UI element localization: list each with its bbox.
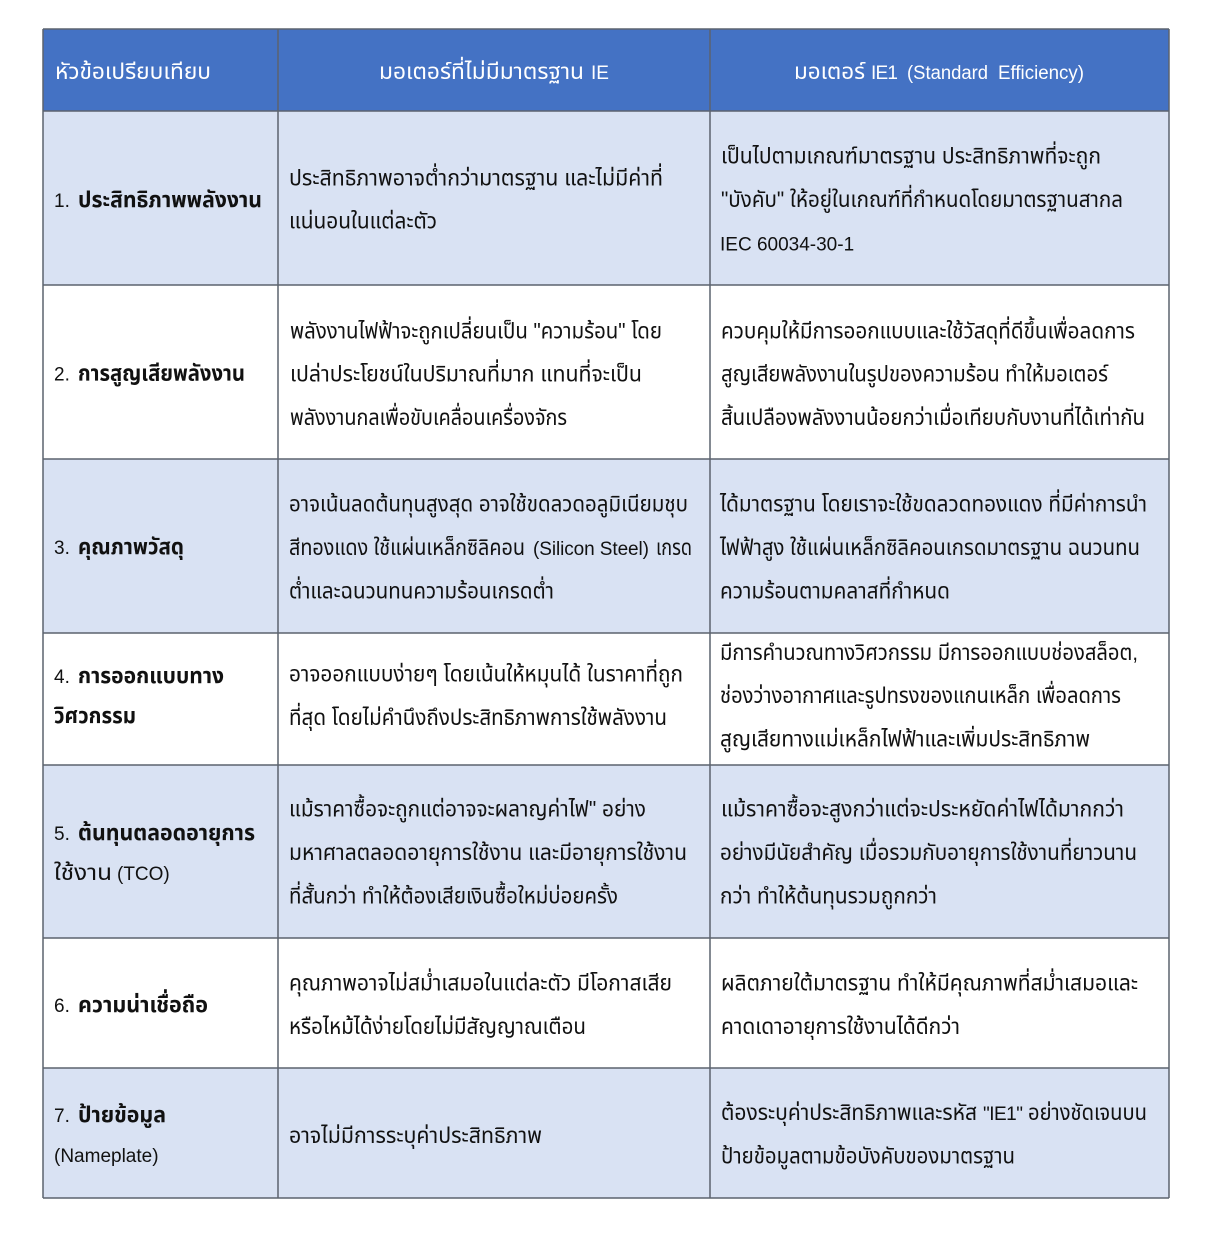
row 4 IE1 text: สูญเสียทางแม่เหล็กไฟฟ้าและเพิ่มประสิทธิภาพ	[720, 725, 1090, 752]
row 4 label: 4.	[54, 667, 70, 688]
row 5 label: (TCO)	[117, 864, 170, 885]
row 4 non-IE text: ที่สุด โดยไม่คำนึงถึงประสิทธิภาพการใช้พลังงาน	[289, 702, 667, 731]
header: IE1 motor column: มอเตอร์	[794, 59, 866, 84]
row 3 label: คุณภาพวัสดุ	[78, 534, 184, 560]
row 4 label: การออกแบบทาง	[78, 663, 224, 688]
row 7 label: ป้ายข้อมูล	[78, 1102, 166, 1128]
row 6 non-IE text: คุณภาพอาจไม่สม่ำเสมอในแต่ละตัว มีโอกาสเสีย	[289, 968, 672, 996]
row 7 IE1 text: อย่างชัดเจนบน	[1028, 1100, 1147, 1125]
row 6 non-IE text	[278, 938, 710, 1068]
row 3 IE1 text	[710, 459, 1169, 633]
row 5 non-IE text: ที่สั้นกว่า ทำให้ต้องเสียเงินซื้อใหม่บ่อยครั้ง	[289, 880, 618, 908]
row 1 label	[43, 111, 278, 285]
row 3 non-IE text	[278, 459, 710, 633]
header: non-IE motor column: IE	[591, 63, 609, 84]
row 2 non-IE text	[278, 285, 710, 459]
row 1 IE1 text: IEC 60034-30-1	[720, 234, 854, 256]
row 6 label: 6.	[54, 996, 70, 1017]
row 4 IE1 text: มีการคำนวณทางวิศวกรรม มีการออกแบบช่องสล็อต,	[720, 640, 1138, 665]
row 3 non-IE text: ต่ำและฉนวนทนความร้อนเกรดต่ำ	[289, 576, 554, 604]
row 5 label	[43, 765, 278, 938]
row 2 label	[43, 285, 278, 459]
header: topic column: หัวข้อเปรียบเทียบ	[55, 59, 211, 84]
row 4 label: วิศวกรรม	[54, 703, 136, 728]
row 7 IE1 text	[710, 1068, 1169, 1198]
row 5 non-IE text	[278, 765, 710, 938]
row 2 label: การสูญเสียพลังงาน	[78, 360, 245, 386]
row 3 label	[43, 459, 278, 633]
header: non-IE motor column	[278, 29, 710, 111]
row 5 IE1 text: กว่า ทำให้ต้นทุนรวมถูกกว่า	[720, 884, 937, 910]
row 3 non-IE text: เกรด	[656, 535, 692, 560]
header: topic column	[43, 29, 278, 111]
row 3 IE1 text: ได้มาตรฐาน โดยเราจะใช้ขดลวดทองแดง ที่มีค่าการนำ	[719, 488, 1147, 516]
row 3 IE1 text: ความร้อนตามคลาสที่กำหนด	[720, 576, 950, 604]
row 7 IE1 text: "IE1"	[983, 1104, 1023, 1125]
row 6 label	[43, 938, 278, 1068]
row 1 non-IE text: ประสิทธิภาพอาจต่ำกว่ามาตรฐาน และไม่มีค่าที่	[289, 162, 663, 190]
row 7 label: 7.	[54, 1106, 70, 1127]
row 5 IE1 text: แม้ราคาซื้อจะสูงกว่าแต่จะประหยัดค่าไฟได้มากกว่า	[721, 794, 1124, 822]
header: IE1 motor column	[710, 29, 1169, 111]
row 6 non-IE text: หรือไหม้ได้ง่ายโดยไม่มีสัญญาณเตือน	[289, 1014, 586, 1039]
row 6 IE1 text	[710, 938, 1169, 1068]
row 1 non-IE text	[278, 111, 710, 285]
row 5 label: ใช้งาน	[54, 860, 112, 885]
row 7 IE1 text: ต้องระบุค่าประสิทธิภาพและรหัส	[721, 1100, 977, 1126]
row 1 IE1 text: "บังคับ" ให้อยู่ในเกณฑ์ที่กำหนดโดยมาตรฐานสากล	[721, 184, 1123, 213]
row 2 non-IE text: พลังงานกลเพื่อขับเคลื่อนเครื่องจักร	[290, 402, 567, 430]
row 7 non-IE text	[278, 1068, 710, 1198]
row 2 non-IE text: พลังงานไฟฟ้าจะถูกเปลี่ยนเป็น "ความร้อน" โดย	[290, 316, 662, 344]
header: IE1 motor column: (Standard	[907, 63, 988, 84]
row 3 non-IE text: (Silicon Steel)	[533, 539, 649, 560]
row 7 IE1 text: ป้ายข้อมูลตามข้อบังคับของมาตรฐาน	[721, 1144, 1015, 1170]
row 7 non-IE text: อาจไม่มีการระบุค่าประสิทธิภาพ	[289, 1123, 542, 1149]
row 4 IE1 text	[710, 633, 1169, 765]
row 1 IE1 text	[710, 111, 1169, 285]
row 3 IE1 text: ไฟฟ้าสูง ใช้แผ่นเหล็กซิลิคอนเกรดมาตรฐาน ฉนวนทน	[719, 535, 1140, 561]
row 2 IE1 text: สูญเสียพลังงานในรูปของความร้อน ทำให้มอเตอร์	[721, 362, 1109, 388]
row 6 IE1 text: คาดเดาอายุการใช้งานได้ดีกว่า	[721, 1014, 960, 1040]
row 4 non-IE text	[278, 633, 710, 765]
row 1 IE1 text: เป็นไปตามเกณฑ์มาตรฐาน ประสิทธิภาพที่จะถูก	[721, 140, 1101, 170]
row 3 label: 3.	[54, 538, 70, 559]
row 5 label: 5.	[54, 824, 70, 845]
row 1 label: ประสิทธิภาพพลังงาน	[78, 187, 262, 212]
header: IE1 motor column: IE1	[871, 63, 898, 84]
row 3 non-IE text: สีทองแดง ใช้แผ่นเหล็กซิลิคอน	[289, 535, 525, 560]
row 1 non-IE text: แน่นอนในแต่ละตัว	[289, 208, 437, 234]
row 6 IE1 text: ผลิตภายใต้มาตรฐาน ทำให้มีคุณภาพที่สม่ำเสมอและ	[721, 968, 1138, 996]
row 4 label	[43, 633, 278, 765]
row 5 non-IE text: แม้ราคาซื้อจะถูกแต่อาจจะผลาญค่าไฟ" อย่าง	[289, 794, 646, 822]
header: non-IE motor column: มอเตอร์ที่ไม่มีมาตรฐาน	[379, 56, 584, 84]
row 1 label: 1.	[54, 191, 70, 212]
row 2 IE1 text: ควบคุมให้มีการออกแบบและใช้วัสดุที่ดีขึ้นเพื่อลดการ	[721, 316, 1135, 344]
row 2 IE1 text: สิ้นเปลืองพลังงานน้อยกว่าเมื่อเทียบกับงานที่ได้เท่ากัน	[721, 402, 1145, 430]
row 5 IE1 text: อย่างมีนัยสำคัญ เมื่อรวมกับอายุการใช้งานที่ยาวนาน	[720, 837, 1137, 866]
header: IE1 motor column: Efficiency)	[998, 63, 1084, 84]
row 2 IE1 text	[710, 285, 1169, 459]
row 5 IE1 text	[710, 765, 1169, 938]
row 5 non-IE text: มหาศาลตลอดอายุการใช้งาน และมีอายุการใช้งาน	[289, 840, 687, 866]
row 3 non-IE text: อาจเน้นลดต้นทุนสูงสุด อาจใช้ขดลวดอลูมิเนียมชุบ	[289, 492, 688, 518]
row 2 label: 2.	[54, 364, 70, 386]
row 7 label: (Nameplate)	[54, 1146, 159, 1167]
row 2 non-IE text: เปล่าประโยชน์ในปริมาณที่มาก แทนที่จะเป็น	[290, 358, 642, 386]
row 7 label	[43, 1068, 278, 1198]
row 4 non-IE text: อาจออกแบบง่ายๆ โดยเน้นให้หมุนได้ ในราคาที่ถูก	[289, 658, 683, 688]
row 5 label: ต้นทุนตลอดอายุการ	[78, 820, 255, 846]
row 6 label: ความน่าเชื่อถือ	[78, 989, 208, 1017]
row 4 IE1 text: ช่องว่างอากาศและรูปทรงของแกนเหล็ก เพื่อลดการ	[720, 680, 1121, 709]
